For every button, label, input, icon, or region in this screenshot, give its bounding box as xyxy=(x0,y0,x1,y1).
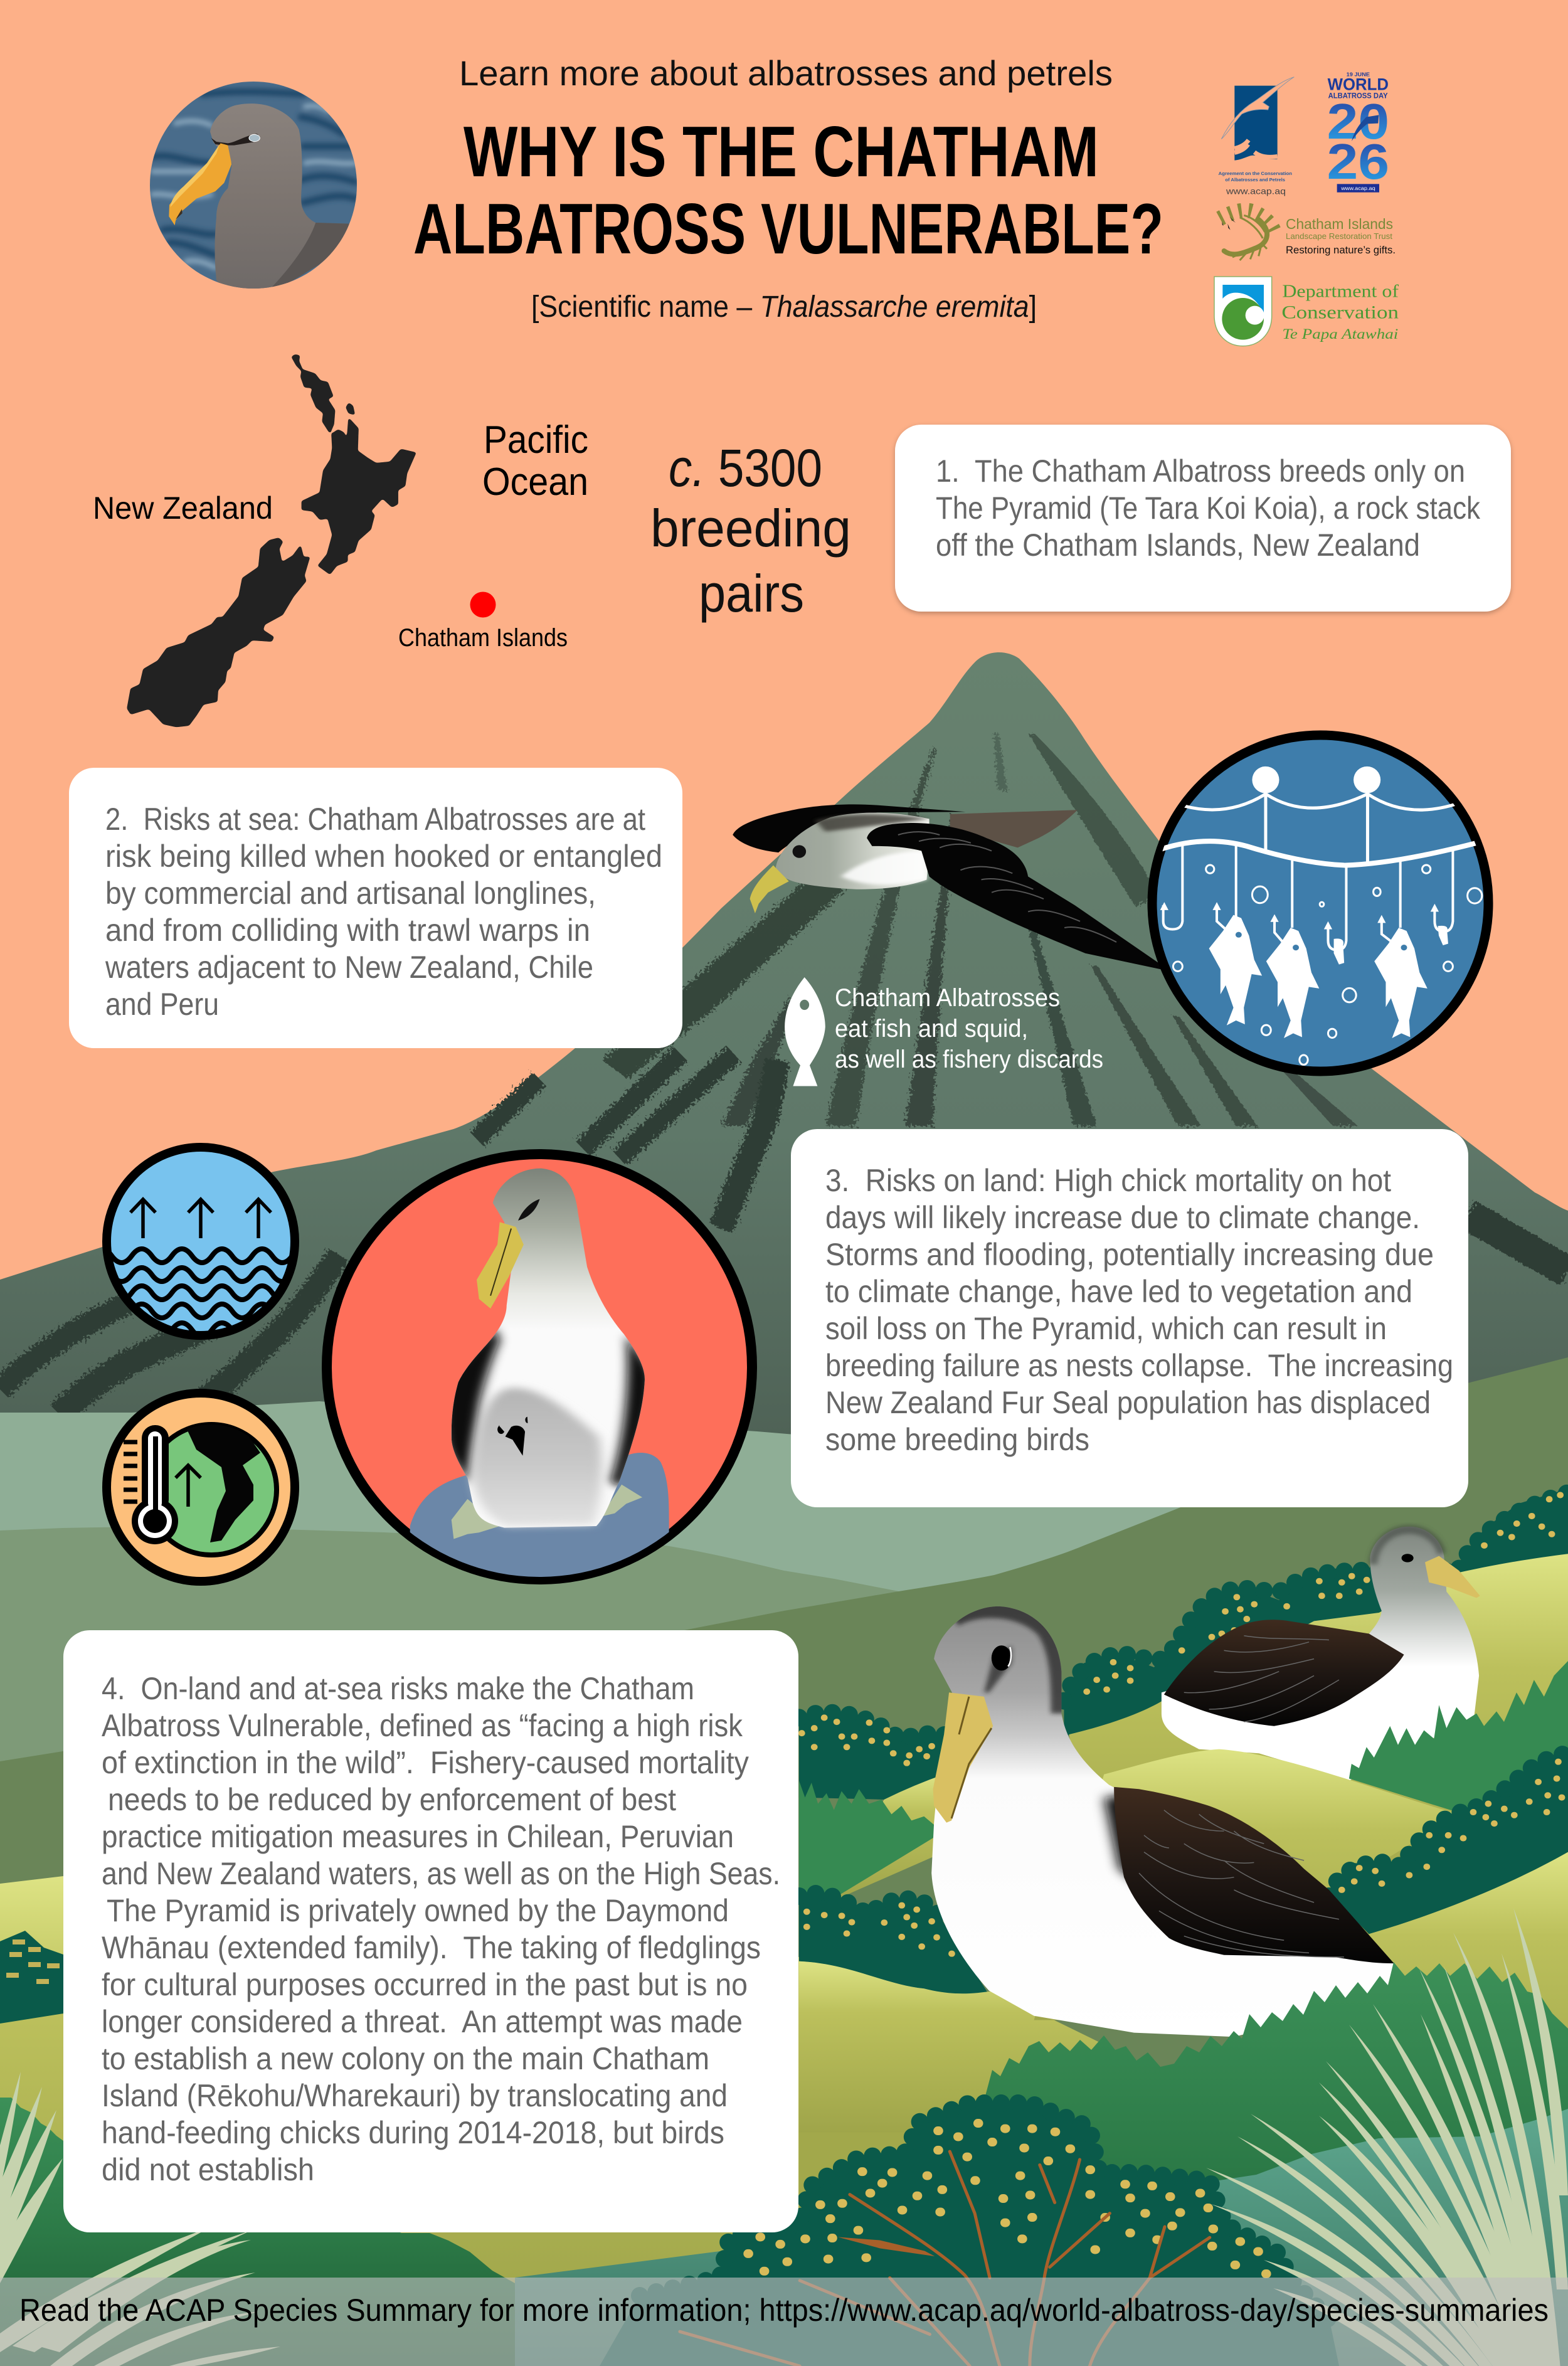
front bird bill xyxy=(933,1692,993,1823)
panel 3: risks on land: days will likely increase due to climate change. xyxy=(825,1200,1420,1235)
panel 3: risks on land: New Zealand Fur Seal population has displaced xyxy=(825,1385,1431,1420)
floats xyxy=(1252,767,1279,793)
map label: Chatham Islands: Chatham Islands xyxy=(398,624,568,652)
chick xyxy=(472,1388,602,1526)
mountain: The Pyramid xyxy=(0,652,1568,1455)
logo: Chatham Islands Landscape Restoration Trust: Restoring nature’s gifts. xyxy=(1286,244,1396,256)
logo: World Albatross Day 2026: ALBATROSS DAY xyxy=(1328,92,1388,100)
adult bird xyxy=(452,1169,645,1528)
far wing xyxy=(950,810,1078,847)
logo: Department of Conservation: Conservation xyxy=(1281,302,1399,323)
main line xyxy=(1161,841,1480,865)
rock xyxy=(410,1453,669,1581)
front bush with berries xyxy=(600,2103,1339,2366)
diet note: Chatham Albatrosses xyxy=(835,984,1060,1012)
albatross with chick circle xyxy=(327,1154,752,1581)
map label: Pacific Ocean xyxy=(482,418,588,504)
photo bird body xyxy=(210,103,349,290)
longline fishing circle xyxy=(1152,735,1488,1071)
bird: front albatross xyxy=(931,1606,1394,2037)
panel 4: conservation status: to establish a new colony on the main Chatham xyxy=(102,2041,709,2076)
panel 3: risks on land: breeding failure as nests collapse. The increasing xyxy=(825,1348,1453,1383)
palm fronds right xyxy=(1206,1908,1568,2366)
photo bird bill xyxy=(169,143,231,225)
logo: ACAP xyxy=(1219,77,1294,196)
hooks xyxy=(1163,846,1453,950)
title xyxy=(413,112,1163,269)
thermometer xyxy=(132,1425,178,1544)
icon: sea level rise xyxy=(92,1147,332,1337)
logo: Chatham Islands Landscape Restoration Trust xyxy=(1220,210,1396,260)
logo: Chatham Islands Landscape Restoration Trust: Chatham Islands xyxy=(1286,216,1393,232)
panel 4: conservation status: Albatross Vulnerable, defined as “facing a high risk xyxy=(102,1708,743,1743)
adult sides xyxy=(443,1328,652,1488)
panel 1: breeding site: The Pyramid (Te Tara Koi Koia), a rock stack xyxy=(936,491,1481,526)
panel 4: conservation status: and New Zealand waters, as well as on the High Seas. xyxy=(102,1856,780,1891)
float lines xyxy=(1179,794,1459,865)
adult bill xyxy=(477,1222,524,1308)
panel 4: conservation status: practice mitigation measures in Chilean, Peruvian xyxy=(102,1819,734,1854)
front grass bank xyxy=(982,1962,1568,2366)
logo: ACAP: Agreement on the Conservation xyxy=(1219,171,1293,176)
body xyxy=(776,813,930,889)
map marker: Chatham Islands xyxy=(470,592,495,617)
chick face xyxy=(497,1417,527,1456)
intro line: Learn more about albatrosses and petrels xyxy=(459,53,1113,93)
landscape: bushes and hills behind birds xyxy=(799,1488,1568,2133)
footer band xyxy=(0,2278,1568,2366)
panel 2: risks at sea xyxy=(69,768,682,1048)
logo: ACAP: of Albatrosses and Petrels xyxy=(1225,177,1285,183)
logo: World Albatross Day 2026: www.acap.aq xyxy=(1340,185,1375,191)
logo: Department of Conservation xyxy=(1214,277,1399,346)
panel 4: conservation status: Island (Rēkohu/Wharekauri) by translocating and xyxy=(102,2078,728,2113)
panel 4: conservation status xyxy=(63,1630,798,2232)
logo: Department of Conservation: Department of xyxy=(1282,282,1399,301)
statistic: breeding pairs: pairs xyxy=(699,564,804,623)
panel 2: risks at sea: and from colliding with trawl warps in xyxy=(105,913,590,948)
map label: New Zealand: New Zealand xyxy=(93,491,273,526)
photo bird brow and eye xyxy=(211,134,260,146)
map label: Pacific Ocean: Pacific xyxy=(484,418,588,462)
rear bird wing xyxy=(1164,1620,1404,1726)
fish xyxy=(1209,915,1428,1038)
panel 2: risks at sea: 2. Risks at sea: Chatham Albatrosses are at xyxy=(105,802,645,837)
logo: World Albatross Day 2026 xyxy=(1327,72,1389,193)
logo: World Albatross Day 2026: WORLD xyxy=(1328,75,1389,93)
logo: Chatham Islands Landscape Restoration Trust: Landscape Restoration Trust xyxy=(1286,232,1393,241)
yellow ground xyxy=(0,2070,1568,2366)
front bird wing xyxy=(1114,1787,1394,1963)
panel 1: breeding site: off the Chatham Islands, New Zealand xyxy=(936,528,1420,563)
logo: World Albatross Day 2026: 19 JUNE xyxy=(1347,72,1370,78)
logo: Department of Conservation: Te Papa Atawhai xyxy=(1282,326,1398,342)
panel 3: risks on land: Storms and flooding, potentially increasing due xyxy=(825,1237,1434,1272)
diet note: as well as fishery discards xyxy=(835,1046,1103,1073)
panel 4: conservation status: Whānau (extended family). The taking of fledglings xyxy=(102,1930,761,1965)
top wing xyxy=(733,804,966,852)
title: ALBATROSS VULNERABLE? xyxy=(413,189,1163,269)
panel 2: risks at sea: waters adjacent to New Zealand, Chile xyxy=(105,950,593,985)
bubbles xyxy=(1173,865,1482,1064)
panel 4: conservation status: did not establish xyxy=(102,2152,314,2187)
map label: Pacific Ocean: Ocean xyxy=(482,460,588,504)
left hedge xyxy=(0,1931,63,2024)
statistic: breeding pairs: c. 5300 xyxy=(669,438,822,497)
diet note: eat fish and squid, xyxy=(835,1015,1028,1042)
panel 2: risks at sea: and Peru xyxy=(105,987,219,1022)
eye xyxy=(793,845,806,858)
feet xyxy=(452,1485,642,1539)
near wing xyxy=(867,823,1163,969)
flying albatross xyxy=(733,804,1163,969)
bill xyxy=(750,865,789,913)
panel 3: risks on land: some breeding birds xyxy=(825,1422,1089,1457)
bird: rear albatross xyxy=(1162,1527,1480,1781)
panel 3: risks on land: to climate change, have led to vegetation and xyxy=(825,1274,1412,1309)
panel 3: risks on land xyxy=(791,1129,1468,1507)
panel 4: conservation status: for cultural purposes occurred in the past but is no xyxy=(102,1967,748,2002)
panel 4: conservation status: The Pyramid is privately owned by the Daymond xyxy=(107,1893,729,1928)
logo: ACAP: www.acap.aq xyxy=(1226,186,1286,196)
title: WHY IS THE CHATHAM xyxy=(464,112,1099,192)
icon: fish xyxy=(785,977,825,1086)
panel 3: risks on land: 3. Risks on land: High chick mortality on hot xyxy=(825,1163,1391,1198)
logo: World Albatross Day 2026: 20 xyxy=(1327,93,1389,149)
logos xyxy=(1214,72,1399,346)
panel 4: conservation status: of extinction in the wild”. Fishery-caused mortality xyxy=(102,1745,749,1780)
statistic: breeding pairs: breeding xyxy=(650,499,851,558)
rear bird eye xyxy=(1402,1554,1414,1562)
panel 3: risks on land: soil loss on The Pyramid, which can result in xyxy=(825,1311,1387,1346)
rear bird bill xyxy=(1425,1556,1480,1598)
left grass bank xyxy=(0,2098,515,2366)
logo: World Albatross Day 2026: 26 xyxy=(1327,134,1389,189)
map of New Zealand xyxy=(93,355,588,726)
yellow base hills xyxy=(0,1876,799,2321)
diet note xyxy=(835,984,1103,1073)
teal hill xyxy=(515,2109,1568,2366)
rear bird head cap xyxy=(1373,1529,1441,1564)
panel 4: conservation status: longer considered a threat. An attempt was made xyxy=(102,2004,743,2039)
far hills xyxy=(0,1357,1568,2366)
continent xyxy=(184,1423,260,1542)
bush stems xyxy=(680,2151,1210,2366)
panel 2: risks at sea: by commercial and artisanal longlines, xyxy=(105,876,596,911)
photo: Chatham Albatross head xyxy=(150,82,357,290)
panel 2: risks at sea: risk being killed when hooked or entangled xyxy=(105,839,662,874)
head shading xyxy=(954,1610,1164,1902)
panel 4: conservation status: hand-feeding chicks during 2014-2018, but birds xyxy=(102,2115,724,2150)
adult eye xyxy=(518,1199,540,1221)
icon: global warming xyxy=(107,1393,295,1581)
statistic: breeding pairs xyxy=(650,438,851,623)
palm fronds left xyxy=(0,2072,280,2366)
panel 1: breeding site: 1. The Chatham Albatross breeds only on xyxy=(936,454,1465,489)
panel 4: conservation status: needs to be reduced by enforcement of best xyxy=(108,1782,676,1817)
scientific name: [Scientific name – Thalassarche eremita] xyxy=(531,290,1037,324)
panel 1: breeding site xyxy=(895,425,1511,612)
panel 4: conservation status: 4. On-land and at-sea risks make the Chatham xyxy=(102,1671,694,1706)
front bird eye xyxy=(992,1645,1012,1670)
mountain stripes xyxy=(0,733,1568,1414)
